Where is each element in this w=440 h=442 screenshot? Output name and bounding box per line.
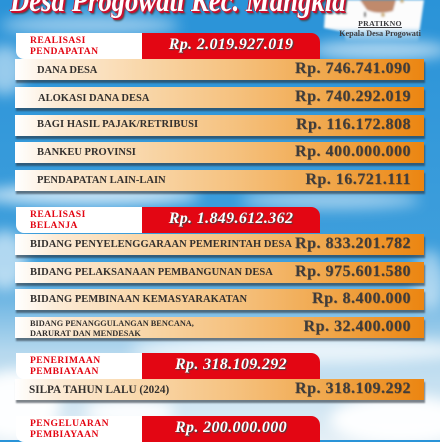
panel: realisasi belanja header: BELANJA — [30, 220, 78, 231]
row: silpa tahun lalu: Rp. 318.109.292 — [295, 380, 411, 397]
row: bagi hasil pajak: Rp. 116.172.808 — [296, 116, 411, 133]
row: silpa tahun lalu: SILPA TAHUN LALU (2024) — [29, 384, 169, 396]
panel: pengeluaran pembiayaan header: PENGELUARAN — [30, 418, 109, 429]
row: pembinaan kemasyarakatan: Rp. 8.400.000 — [312, 290, 411, 307]
panel: realisasi pendapatan header: Rp. 2.019.927.019 — [169, 36, 293, 53]
row: penanggulangan bencana: Rp. 32.400.000 — [304, 318, 411, 335]
panel: realisasi pendapatan header: PENDAPATAN — [30, 46, 98, 57]
row: pelaksanaan pembangunan desa — [15, 262, 424, 283]
row: penanggulangan bencana: BIDANG PENANGGULANGAN BENCANA, — [30, 319, 194, 328]
caption: name and title: PRATIKNO — [358, 19, 402, 28]
row: bankeu provinsi: Rp. 400.000.000 — [295, 143, 411, 160]
panel: pengeluaran pembiayaan header: Rp. 200.000.000 — [175, 419, 287, 436]
panel: penerimaan pembiayaan header: Rp. 318.109.292 — [175, 356, 287, 373]
row: pelaksanaan pembangunan desa: Rp. 975.601.580 — [295, 263, 411, 280]
row: alokasi dana desa: ALOKASI DANA DESA — [38, 93, 149, 104]
panel: pengeluaran pembiayaan header: PEMBIAYAAN — [30, 429, 99, 440]
panel: penerimaan pembiayaan header: PENERIMAAN — [30, 355, 101, 366]
panel: realisasi pendapatan header — [16, 33, 320, 59]
row: bankeu provinsi: BANKEU PROVINSI — [37, 147, 136, 158]
row: penanggulangan bencana: DARURAT DAN MENDESAK — [30, 328, 141, 338]
portrait: village head — [322, 0, 426, 42]
row: pelaksanaan pembangunan desa: BIDANG PELAKSANAAN PEMBANGUNAN DESA — [30, 267, 273, 278]
panel: realisasi belanja header: Rp. 1.849.612.362 — [169, 210, 293, 227]
row: silpa tahun lalu — [15, 379, 424, 400]
caption: name and title: Kepala Desa Progowati — [339, 28, 421, 38]
row: penyelenggaraan pemerintah desa — [15, 234, 424, 255]
row: bagi hasil pajak — [15, 115, 424, 136]
panel: realisasi belanja header — [16, 207, 320, 233]
row: pendapatan lain-lain — [15, 170, 424, 191]
row: penyelenggaraan pemerintah desa: Rp. 833.201.782 — [295, 235, 411, 252]
row: dana desa — [15, 59, 424, 80]
row: pembinaan kemasyarakatan — [15, 289, 424, 310]
caption: name and title — [339, 19, 421, 38]
row: bagi hasil pajak: BAGI HASIL PAJAK/RETRIBUSI — [37, 119, 198, 130]
panel: realisasi belanja header: REALISASI — [30, 209, 86, 220]
panel: realisasi pendapatan header: REALISASI — [30, 35, 86, 46]
panel: penerimaan pembiayaan header — [16, 353, 320, 379]
row: dana desa: Rp. 746.741.090 — [295, 60, 411, 77]
row: pendapatan lain-lain: PENDAPATAN LAIN-LAIN — [37, 175, 166, 186]
row: pendapatan lain-lain: Rp. 16.721.111 — [305, 171, 411, 188]
row: alokasi dana desa — [15, 87, 424, 108]
panel: penerimaan pembiayaan header: PEMBIAYAAN — [30, 366, 99, 377]
row: pembinaan kemasyarakatan: BIDANG PEMBINAAN KEMASYARAKATAN — [30, 294, 247, 305]
row: alokasi dana desa: Rp. 740.292.019 — [295, 88, 411, 105]
panel: pengeluaran pembiayaan header — [16, 416, 320, 442]
row: penyelenggaraan pemerintah desa: BIDANG PENYELENGGARAAN PEMERINTAH DESA — [30, 239, 292, 250]
row: dana desa: DANA DESA — [37, 65, 97, 76]
row: bankeu provinsi — [15, 142, 424, 163]
row: penanggulangan bencana — [15, 317, 424, 338]
